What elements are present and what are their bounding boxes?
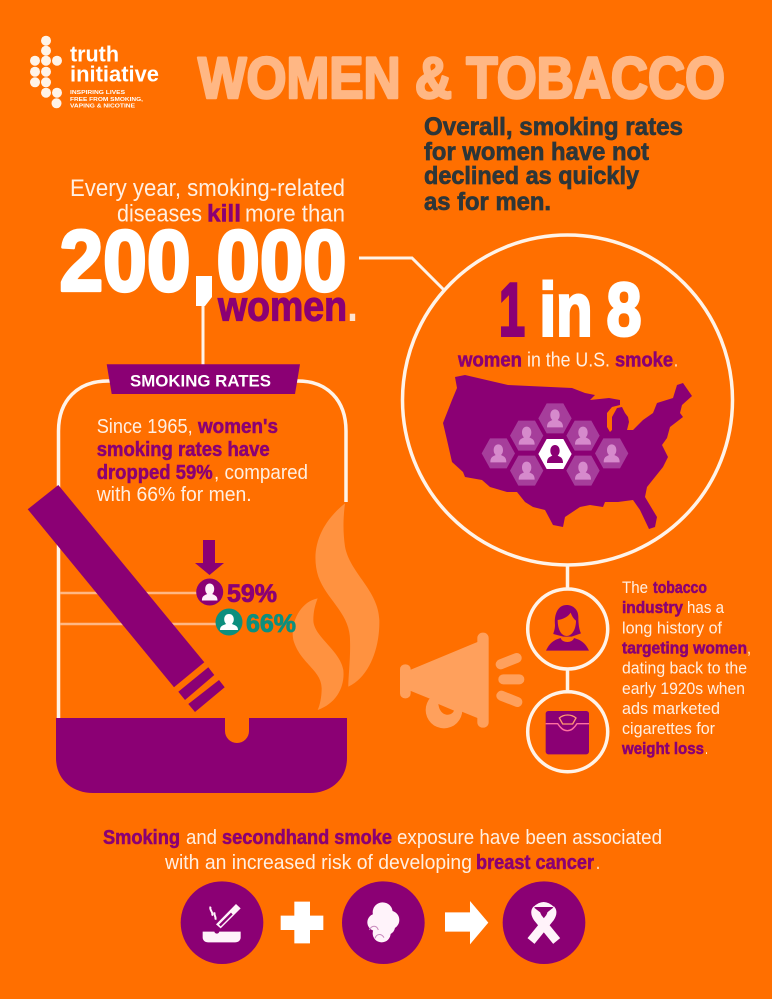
text: breast cancer risk: and: [186, 827, 217, 849]
text: tobacco industry targeting women: .: [705, 740, 708, 758]
marker: men 66%: 66%: [246, 610, 296, 638]
text: breast cancer risk: .: [596, 852, 600, 874]
icon: smoke cloud: [342, 881, 425, 964]
big stat: 1 in 8: [499, 267, 642, 351]
badge: smoking rates: [107, 364, 300, 394]
text: women's smoking rates dropped: smoking rates have: [97, 438, 270, 461]
text: tobacco industry targeting women: has a: [687, 599, 725, 617]
statistic: 200,000 women killed every year: diseases: [117, 201, 202, 228]
icon: plus: [281, 902, 323, 943]
marker: women 59%: 59%: [227, 580, 277, 608]
caption: women in the U.S. smoke: smoke: [615, 350, 673, 372]
text: women's smoking rates dropped: women's: [197, 415, 278, 438]
statistic: 200,000 women killed every year: ,: [193, 213, 215, 309]
statistic: 200,000 women killed every year: women: [217, 282, 347, 330]
caption: women in the U.S. smoke: [457, 350, 678, 372]
connector: target stems: [566, 565, 569, 692]
subheading: overall smoking rates: Overall, smoking rates: [424, 113, 683, 141]
text: tobacco industry targeting women: targeting women: [622, 640, 747, 658]
logo: truth initiative: VAPING & NICOTINE: [70, 104, 135, 110]
text: tobacco industry targeting women: industry: [622, 599, 684, 617]
big stat: 1 in 8: 1: [499, 267, 525, 351]
caption: women in the U.S. smoke: in the U.S.: [527, 350, 610, 372]
statistic: 200,000 women killed every year: Every year, smoking-related: [70, 175, 345, 202]
text: tobacco industry targeting women: ,: [747, 640, 751, 658]
text: breast cancer risk: breast cancer: [476, 852, 594, 874]
statistic: 200,000 women killed every year: 200: [60, 213, 190, 309]
text: tobacco industry targeting women: tobacco: [653, 579, 707, 597]
panel: 1 in 8 circle: [402, 235, 732, 565]
text: breast cancer risk: [103, 827, 662, 874]
chart lines: rate levels: [60, 593, 218, 624]
icon: cigarette: [28, 485, 225, 712]
icon: megaphone: [400, 633, 519, 728]
panel: smoking rates ashtray frame: [28, 364, 379, 793]
statistic: 200,000 women killed every year: .: [348, 282, 357, 330]
icon: smoke: [293, 503, 379, 710]
text: women's smoking rates dropped: Since 1965,: [97, 415, 193, 438]
statistic: 200,000 women killed every year: kill: [207, 201, 241, 228]
logo: truth initiative: truth: [70, 42, 119, 67]
caption: women in the U.S. smoke: women: [457, 350, 522, 372]
text: breast cancer risk: exposure have been associated: [397, 827, 662, 849]
text: tobacco industry targeting women: The: [622, 579, 648, 597]
logo: truth initiative: [30, 36, 159, 110]
subheading: overall smoking rates: [424, 113, 683, 216]
statistic: 200,000 women killed every year: [60, 175, 357, 330]
icon: weight scale in circle: [528, 692, 608, 772]
marker: women 59%: [196, 578, 277, 608]
subheading: overall smoking rates: declined as quickly: [424, 162, 639, 190]
text: women's smoking rates dropped: dropped 59%: [97, 461, 213, 484]
big stat: 1 in 8: in: [540, 267, 592, 351]
text: tobacco industry targeting women: cigarettes for: [622, 720, 715, 738]
text: women's smoking rates dropped: [96, 415, 308, 506]
logo: truth initiative: initiative: [70, 62, 159, 87]
caption: women in the U.S. smoke: .: [674, 350, 678, 372]
text: women's smoking rates dropped: with 66% for men.: [96, 483, 252, 506]
arrow: leads to: [445, 901, 488, 944]
logo: truth initiative: FREE FROM SMOKING,: [70, 97, 144, 103]
big stat: 1 in 8: 8: [606, 267, 642, 351]
arrow: down: [195, 540, 224, 575]
text: tobacco industry targeting women: [621, 579, 751, 758]
text: breast cancer risk: with an increased risk of developing: [164, 852, 472, 874]
icon: woman in circle: [528, 589, 608, 669]
logo: truth initiative: INSPIRING LIVES: [70, 90, 125, 96]
badge: smoking rates: SMOKING RATES: [130, 373, 271, 391]
icon: ashtray and cigarette: [181, 881, 263, 964]
connector lines: [203, 258, 445, 365]
text: tobacco industry targeting women: early 1920s when: [622, 680, 745, 698]
text: breast cancer risk: Smoking: [103, 827, 180, 849]
icon row: smoking plus smoke leads to cancer: [181, 881, 585, 964]
subheading: overall smoking rates: for women have not: [424, 138, 650, 166]
icon: ashtray: [56, 718, 347, 793]
text: tobacco industry targeting women: dating back to the: [622, 660, 747, 678]
text: women's smoking rates dropped: , compared: [214, 461, 308, 484]
text: tobacco industry targeting women: weight loss: [621, 740, 704, 758]
statistic: 200,000 women killed every year: more than: [245, 201, 345, 228]
text: breast cancer risk: secondhand smoke: [222, 827, 392, 849]
icon: awareness ribbon: [503, 881, 585, 964]
marker: men 66%: [216, 608, 296, 638]
subheading: overall smoking rates: as for men.: [424, 188, 551, 216]
text: tobacco industry targeting women: long history of: [622, 620, 722, 638]
map: United States with hexagon women: [443, 375, 692, 529]
text: tobacco industry targeting women: ads marketed: [622, 700, 720, 718]
statistic: 200,000 women killed every year: 000: [216, 213, 346, 309]
